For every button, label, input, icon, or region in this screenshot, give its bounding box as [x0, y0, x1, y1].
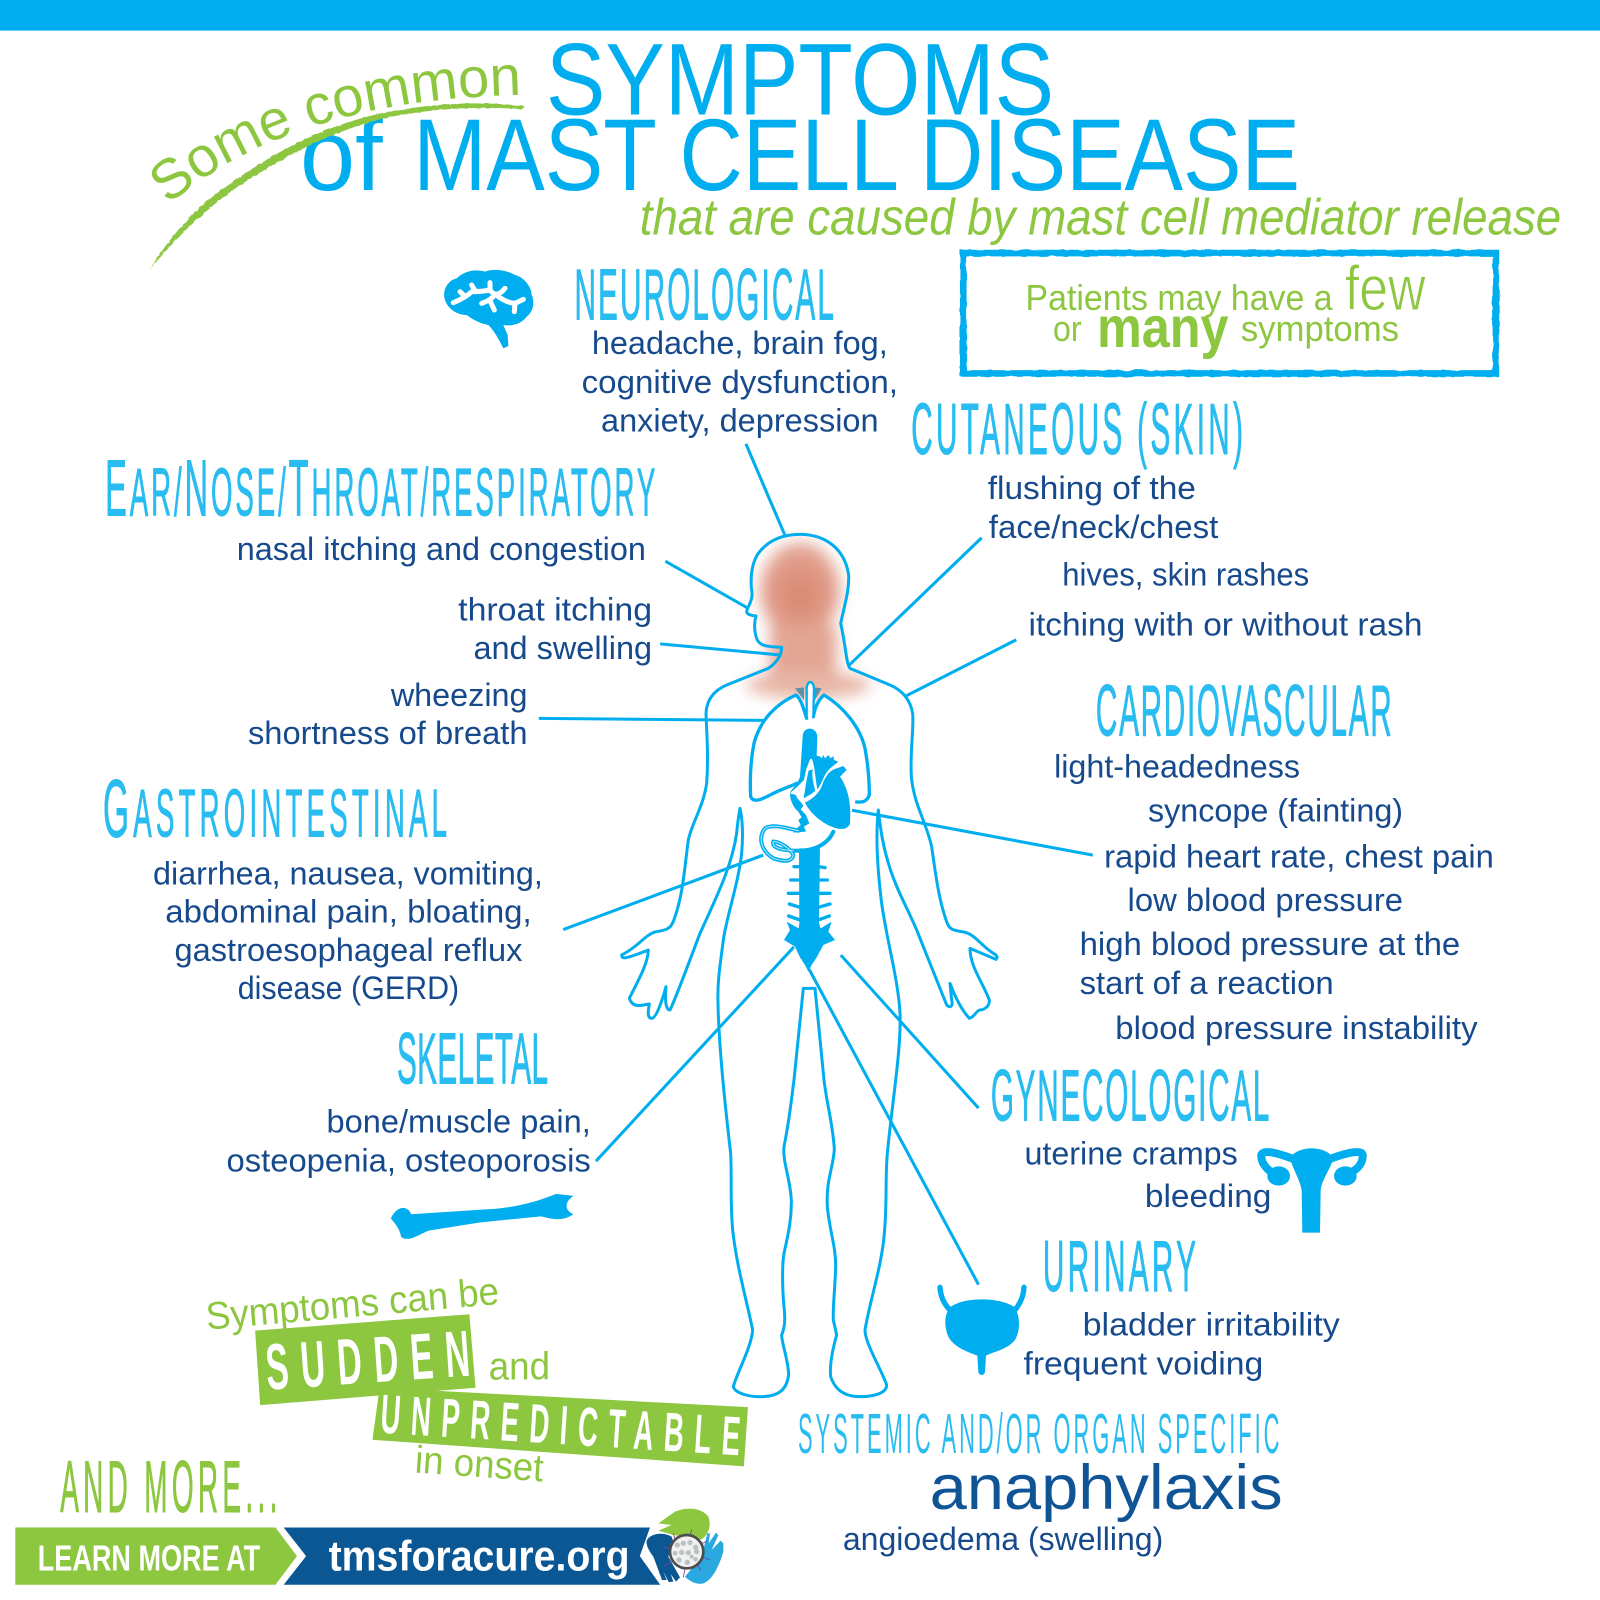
symptoms: neurological: cognitive dysfunction,	[582, 363, 898, 400]
panel: gastrointestinal	[103, 765, 543, 1006]
panel: urinary	[940, 1225, 1341, 1381]
panel: skeletal	[227, 1018, 591, 1239]
callout: few or many: or	[1053, 309, 1082, 349]
heading: ear nose throat respiratory: EAR/NOSE/THROAT/RESPIRATORY	[105, 443, 655, 532]
symptoms: gastrointestinal: gastroesophageal reflux	[174, 931, 522, 968]
mast cell	[663, 1529, 710, 1577]
callout: few or many: Patients may have a	[1026, 278, 1333, 318]
symptoms: ear nose throat respiratory: and swelling	[473, 629, 652, 666]
symptoms: gastrointestinal	[153, 855, 543, 1006]
heading: cutaneous: CUTANEOUS (SKIN)	[911, 389, 1243, 470]
symptoms: cardiovascular: syncope (fainting)	[1148, 791, 1403, 828]
banner: unpredictable: UNPREDICTABLE	[379, 1385, 742, 1468]
symptoms: cardiovascular: high blood pressure at the	[1080, 925, 1460, 962]
panel: ear nose throat respiratory	[105, 443, 655, 751]
symptoms: cardiovascular: blood pressure instability	[1115, 1009, 1478, 1046]
spine	[784, 848, 835, 972]
body outline	[622, 534, 997, 1397]
heading: gastrointestinal: GASTROINTESTINAL	[103, 765, 447, 855]
symptoms: cutaneous: flushing of the	[988, 469, 1196, 506]
symptoms: neurological	[582, 324, 898, 439]
callout: sudden and unpredictable	[204, 1270, 748, 1490]
symptoms: gynecological	[1024, 1134, 1271, 1214]
symptoms: urinary: frequent voiding	[1023, 1344, 1263, 1381]
heading: urinary: URINARY	[1043, 1225, 1196, 1307]
heading: neurological: NEUROLOGICAL	[574, 254, 834, 335]
esophagus	[790, 793, 809, 833]
symptoms: ear nose throat respiratory: throat itching	[458, 590, 652, 627]
symptoms: cutaneous: hives, skin rashes	[1062, 556, 1309, 593]
panel: gynecological	[991, 1055, 1363, 1233]
symptoms: skeletal	[227, 1103, 591, 1178]
heading: skeletal: SKELETAL	[397, 1018, 548, 1099]
symptoms: urinary	[1023, 1306, 1341, 1381]
symptoms: ear nose throat respiratory	[237, 530, 652, 751]
title: of	[300, 98, 383, 212]
symptoms: gynecological: uterine cramps	[1024, 1134, 1238, 1171]
symptoms: cardiovascular	[1054, 748, 1494, 1046]
symptoms: gastrointestinal: abdominal pain, bloating,	[165, 892, 532, 929]
symptoms: skeletal: bone/muscle pain,	[327, 1103, 591, 1140]
symptoms: skeletal: osteopenia, osteoporosis	[227, 1141, 591, 1178]
symptoms: neurological: headache, brain fog,	[592, 324, 888, 361]
symptoms: ear nose throat respiratory: nasal itching and congestion	[237, 530, 646, 567]
title	[300, 22, 1300, 212]
body figure	[622, 534, 997, 1397]
banner: sudden: SUDDEN	[263, 1318, 472, 1405]
green hand	[658, 1509, 710, 1539]
text: anaphylaxis: anaphylaxis	[930, 1453, 1283, 1523]
text: symptoms can be: Symptoms can be	[204, 1270, 501, 1339]
symptoms: gastrointestinal: diarrhea, nausea, vomiting,	[153, 855, 543, 892]
banner: learn more: LEARN MORE AT	[38, 1538, 260, 1578]
callout: few or many: symptoms	[1241, 309, 1399, 349]
title: SYMPTOMS	[546, 22, 1054, 136]
heart, vessels and stomach	[761, 729, 850, 861]
banner: learn more	[15, 1528, 660, 1585]
heart	[804, 755, 850, 829]
reaction glow	[746, 542, 871, 698]
top bar	[0, 0, 1600, 31]
title: MAST CELL DISEASE	[413, 98, 1300, 212]
symptoms: cutaneous: itching with or without rash	[1029, 606, 1422, 643]
panel: cardiovascular	[1054, 670, 1494, 1046]
curved intro: some common: Some common	[152, 65, 518, 199]
symptoms: cardiovascular: start of a reaction	[1080, 964, 1334, 1001]
symptoms: cardiovascular: rapid heart rate, chest pain	[1104, 837, 1494, 874]
symptoms: gynecological: bleeding	[1145, 1177, 1271, 1214]
icon: hands logo	[647, 1509, 723, 1584]
symptoms: cardiovascular: low blood pressure	[1128, 881, 1403, 918]
curved intro: some common	[150, 65, 524, 270]
symptoms: neurological: anxiety, depression	[601, 402, 879, 439]
symptoms: cardiovascular: light-headedness	[1054, 748, 1300, 785]
symptoms: cutaneous: face/neck/chest	[989, 508, 1218, 545]
banner: learn more: tmsforacure.org	[329, 1532, 630, 1580]
panel: cutaneous	[911, 389, 1422, 643]
panel: systemic	[798, 1403, 1283, 1557]
navy hand	[647, 1534, 680, 1582]
icon: uterus	[1261, 1148, 1363, 1233]
heading: systemic: SYSTEMIC AND/OR ORGAN SPECIFIC	[798, 1403, 1279, 1466]
panel: neurological	[574, 254, 898, 439]
symptoms: urinary: bladder irritability	[1083, 1306, 1341, 1343]
symptoms: gastrointestinal: disease (GERD)	[238, 969, 459, 1006]
symptoms: cutaneous	[988, 469, 1422, 643]
aorta	[790, 729, 817, 793]
symptoms: ear nose throat respiratory: wheezing	[390, 676, 528, 713]
text: and: and	[489, 1346, 550, 1389]
text: angioedema: angioedema (swelling)	[843, 1520, 1163, 1557]
heading: cardiovascular: CARDIOVASCULAR	[1096, 670, 1392, 751]
text: in onset: in onset	[414, 1439, 545, 1490]
symptoms: ear nose throat respiratory: shortness of breath	[248, 714, 528, 751]
connector lines	[539, 444, 1093, 1285]
lungs	[750, 682, 869, 802]
callout: few or many	[963, 253, 1496, 373]
icon: bladder	[940, 1287, 1024, 1375]
stomach outline	[761, 826, 833, 861]
bronchi shading	[795, 687, 822, 700]
heading: gynecological: GYNECOLOGICAL	[991, 1055, 1269, 1136]
icon: bone	[391, 1194, 573, 1239]
light blue hand	[685, 1533, 723, 1584]
callout: few or many: few	[1345, 254, 1426, 324]
text: and more: AND MORE...	[60, 1446, 277, 1528]
callout: few or many: many	[1097, 296, 1229, 360]
icon: brain	[444, 270, 533, 348]
